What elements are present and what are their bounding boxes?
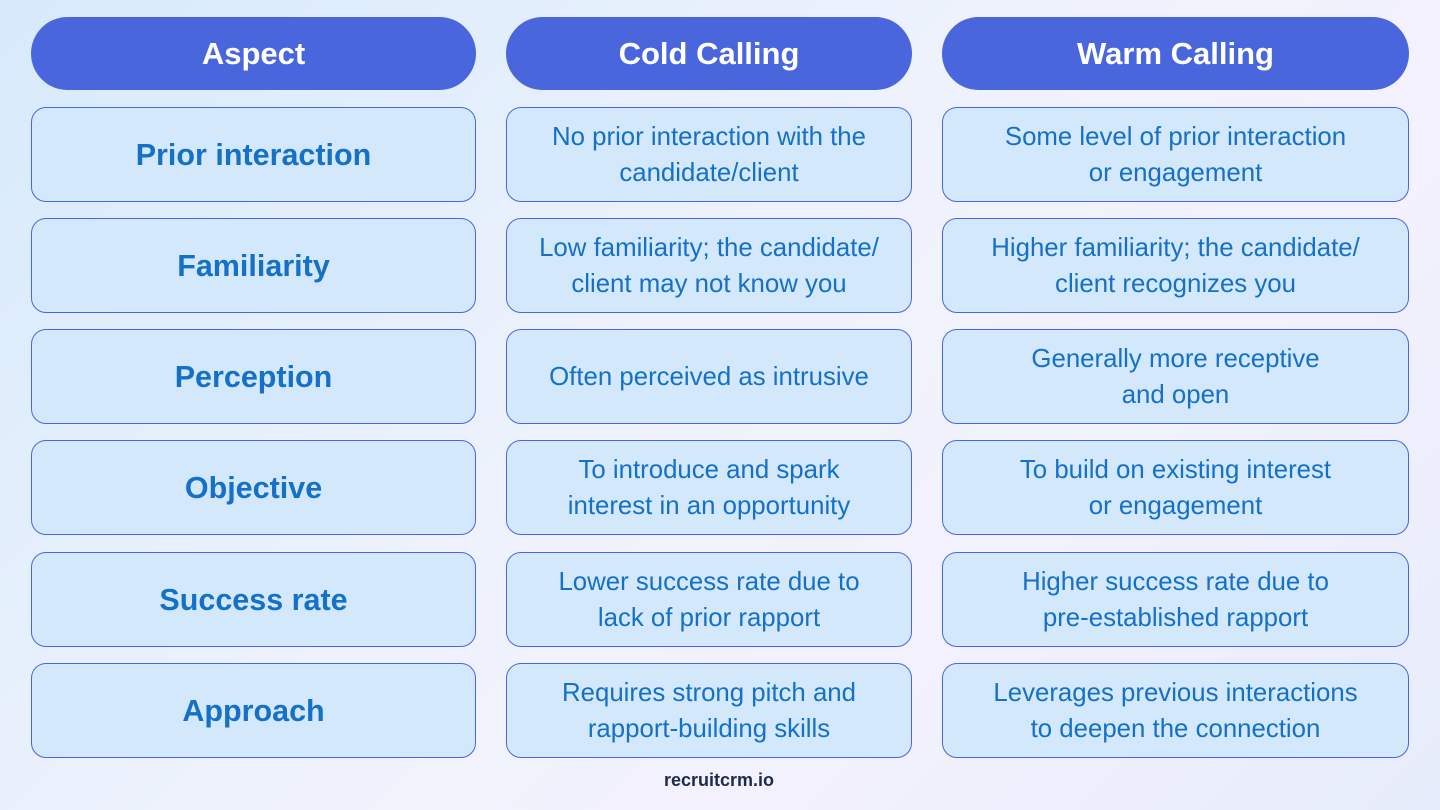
row 3 aspect	[31, 329, 476, 424]
row 5 aspect: Success rate	[159, 582, 348, 616]
header: Warm Calling: Warm Calling	[1077, 36, 1274, 70]
row 6 cold: Requires strong pitch and	[562, 678, 856, 706]
row 4 cold	[506, 440, 912, 535]
header: Cold Calling: Cold Calling	[619, 36, 799, 70]
row 1 cold	[506, 107, 912, 202]
row 5 warm: pre-established rapport	[1043, 604, 1308, 632]
row 3 cold: Often perceived as intrusive	[549, 362, 869, 390]
row 2 warm: client recognizes you	[1055, 270, 1296, 298]
row 6 cold: rapport-building skills	[588, 714, 830, 742]
row 2 cold	[506, 218, 912, 313]
row 3 warm: Generally more receptive	[1031, 344, 1320, 372]
row 6 warm: to deepen the connection	[1031, 714, 1320, 742]
row 6 warm: Leverages previous interactions	[993, 678, 1358, 706]
row 3 warm: and open	[1122, 380, 1229, 408]
row 2 warm: Higher familiarity; the candidate/	[991, 234, 1360, 262]
row 1 aspect	[31, 107, 476, 202]
header: Cold Calling	[506, 17, 912, 90]
header: Warm Calling	[942, 17, 1409, 90]
row 4 cold: interest in an opportunity	[568, 492, 850, 520]
row 4 warm: To build on existing interest	[1020, 456, 1331, 484]
row 6 aspect	[31, 663, 476, 758]
row 2 aspect: Familiarity	[177, 248, 330, 282]
row 4 warm	[942, 440, 1409, 535]
row 2 cold: client may not know you	[571, 270, 847, 298]
row 2 warm	[942, 218, 1409, 313]
row 2 aspect	[31, 218, 476, 313]
row 1 aspect: Prior interaction	[136, 138, 371, 172]
row 5 warm	[942, 552, 1409, 647]
header: Aspect: Aspect	[202, 36, 305, 70]
row 1 warm	[942, 107, 1409, 202]
row 3 aspect: Perception	[175, 360, 332, 394]
row 4 warm: or engagement	[1089, 492, 1262, 520]
row 3 cold	[506, 329, 912, 424]
row 5 warm: Higher success rate due to	[1022, 568, 1329, 596]
row 6 aspect: Approach	[182, 694, 325, 728]
row 3 warm	[942, 329, 1409, 424]
row 5 cold: Lower success rate due to	[558, 568, 860, 596]
row 5 cold: lack of prior rapport	[598, 604, 820, 632]
row 5 cold	[506, 552, 912, 647]
footer: recruitcrm.io	[664, 770, 774, 790]
row 4 aspect: Objective	[185, 470, 322, 504]
row 1 warm: or engagement	[1089, 158, 1262, 186]
row 4 aspect	[31, 440, 476, 535]
row 1 warm: Some level of prior interaction	[1005, 122, 1346, 150]
row 5 aspect	[31, 552, 476, 647]
row 1 cold: candidate/client	[619, 158, 799, 186]
row 4 cold: To introduce and spark	[578, 456, 839, 484]
row 6 warm	[942, 663, 1409, 758]
row 6 cold	[506, 663, 912, 758]
row 1 cold: No prior interaction with the	[552, 122, 866, 150]
row 2 cold: Low familiarity; the candidate/	[539, 234, 879, 262]
header: Aspect	[31, 17, 476, 90]
